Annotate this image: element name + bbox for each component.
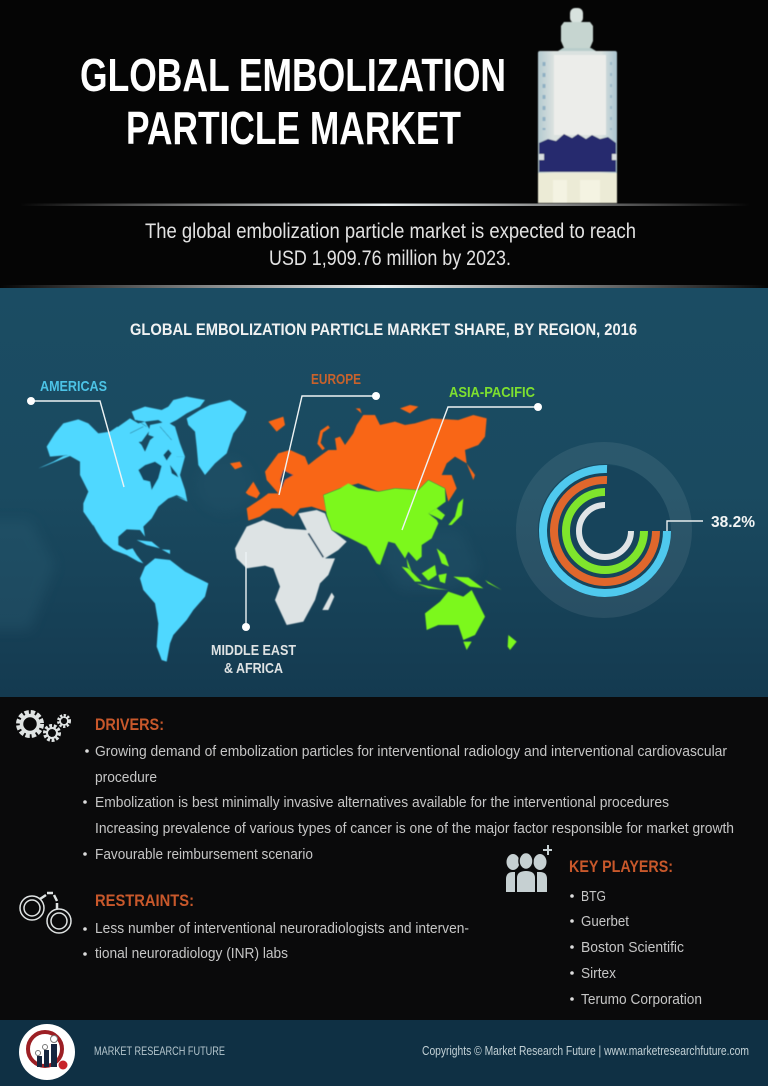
label: Americas callout: AMERICAS <box>40 378 107 395</box>
list: drivers <box>83 743 734 863</box>
icon: Market Research Future logo <box>19 1024 75 1080</box>
label: Americas callout <box>27 378 124 487</box>
footer <box>0 1020 768 1086</box>
region: Europe and Russia <box>230 405 487 521</box>
list: key players <box>570 888 702 1008</box>
label: Europe callout: EUROPE <box>311 371 361 388</box>
footer background <box>0 1020 768 1086</box>
label: Middle East and Africa callout: MIDDLE EAST <box>211 642 296 659</box>
icon: syringe of embolization particles <box>538 8 617 203</box>
icon: people with plus <box>506 845 552 892</box>
panel: drivers, restraints and key players <box>0 697 768 1020</box>
list: drivers: Favourable reimbursement scenario <box>95 846 313 863</box>
chart heading: GLOBAL EMBOLIZATION PARTICLE MARKET SHARE, BY REGION, 2016 <box>130 320 637 339</box>
region: Middle East and Africa <box>235 510 347 625</box>
label: Middle East and Africa callout: & AFRICA <box>224 660 283 677</box>
panel: regional market share <box>0 285 768 697</box>
list: restraints: tional neuroradiology (INR) labs <box>95 945 288 962</box>
icon: gears <box>19 713 69 740</box>
list: key players: Sirtex <box>581 965 616 982</box>
title <box>80 49 506 154</box>
title: GLOBAL EMBOLIZATION <box>80 49 506 101</box>
heading: drivers: DRIVERS: <box>95 715 164 734</box>
list: key players: Guerbet <box>581 913 630 930</box>
heading: restraints: RESTRAINTS: <box>95 891 194 910</box>
panel background <box>0 697 768 1020</box>
background watermark shapes <box>0 457 480 630</box>
list: restraints <box>83 920 469 962</box>
panel background <box>0 288 768 697</box>
list: key players: Boston Scientific <box>581 939 684 956</box>
divider <box>0 285 768 288</box>
market forecast text: The global embolization particle market is expected to reach <box>145 220 636 243</box>
label: Asia-Pacific callout: ASIA-PACIFIC <box>449 384 535 401</box>
region: Asia-Pacific <box>323 480 517 650</box>
label: Middle East and Africa callout <box>211 552 296 677</box>
list: restraints: Less number of interventional neuroradiologists and interven- <box>95 920 469 937</box>
list: key players: BTG <box>581 888 606 905</box>
market forecast text <box>145 220 636 270</box>
divider <box>20 204 750 206</box>
region: Americas <box>38 397 247 662</box>
company name: MARKET RESEARCH FUTURE <box>94 1044 225 1058</box>
header panel <box>20 8 750 270</box>
callout: 38.2% <box>667 514 755 531</box>
list: drivers: Growing demand of embolization particles for interventional radiology and interventional cardiovascular <box>95 743 727 760</box>
title: PARTICLE MARKET <box>126 102 461 154</box>
list: drivers: procedure <box>95 769 157 786</box>
list: drivers: Embolization is best minimally invasive alternatives available for the interventional procedures <box>95 794 669 811</box>
list: drivers: Increasing prevalence of various types of cancer is one of the major factor responsible for market growth <box>95 820 734 837</box>
world map <box>38 397 517 662</box>
callout: 38.2%: 38.2% <box>711 514 755 531</box>
list: key players: Terumo Corporation <box>581 991 702 1008</box>
market forecast text: USD 1,909.76 million by 2023. <box>269 247 511 270</box>
radial bar chart <box>527 453 755 607</box>
label: Europe callout <box>279 371 380 495</box>
heading: key players: KEY PLAYERS: <box>569 857 673 876</box>
icon: handcuffs <box>20 893 71 933</box>
label: Asia-Pacific callout <box>402 384 542 530</box>
